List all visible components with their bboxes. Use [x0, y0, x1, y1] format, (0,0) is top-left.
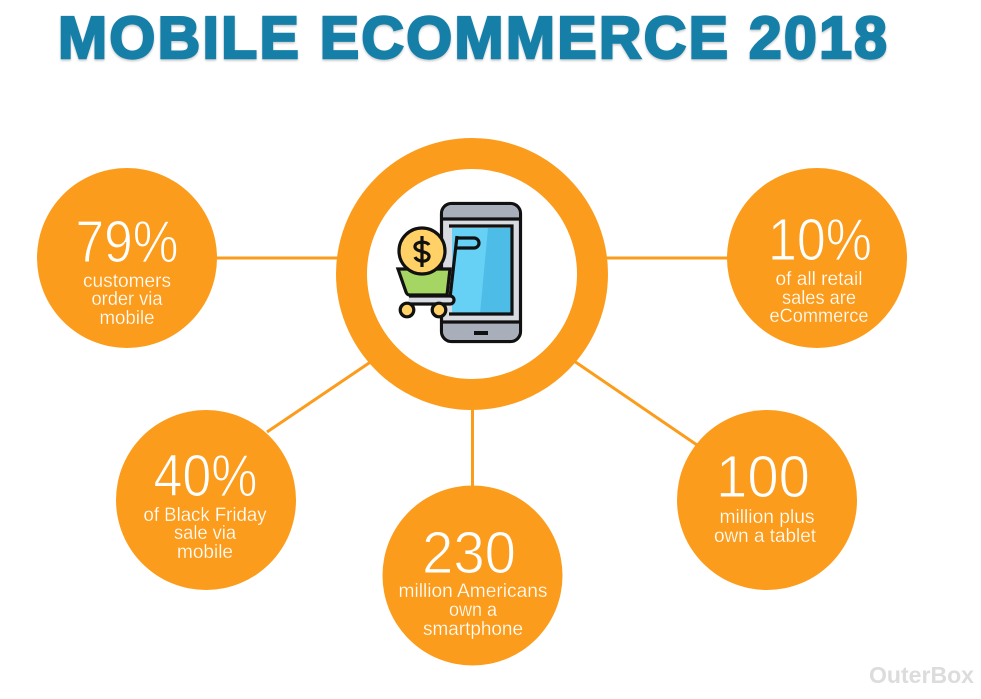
stat: 10% of all retail sales are eCommerce: 10%: [768, 207, 872, 273]
stat: 40% of Black Friday sale via mobile: mobile: [177, 542, 233, 563]
stat: 40% of Black Friday sale via mobile: of Black Friday: [144, 505, 267, 526]
stat: 230 million Americans own a smartphone: million Americans: [398, 581, 548, 602]
stat: 79% customers order via mobile: 79%: [76, 209, 178, 275]
stat: 40% of Black Friday sale via mobile: 40%: [154, 443, 258, 509]
central ring: [352, 154, 592, 394]
stat: 79% customers order via mobile: customers: [83, 271, 171, 292]
stat: 10% of all retail sales are eCommerce: [727, 168, 907, 348]
stat: 230 million Americans own a smartphone: [382, 486, 562, 666]
connector lines: [215, 258, 730, 490]
stat: 10% of all retail sales are eCommerce: eCommerce: [770, 306, 868, 327]
icon: phone: [442, 204, 520, 342]
stat: 10% of all retail sales are eCommerce: sales are: [782, 288, 856, 309]
icon: phone with shopping cart: [398, 204, 520, 342]
title: MOBILE ECOMMERCE 2018: [58, 5, 887, 71]
icon: cart: [398, 236, 479, 317]
stat: 79% customers order via mobile: order via: [92, 289, 163, 310]
icon: dollar coin: [399, 228, 445, 274]
stat: 230 million Americans own a smartphone: own a: [449, 600, 497, 621]
stat: 100 million plus own a tablet: million plus: [720, 507, 814, 528]
stat: 40% of Black Friday sale via mobile: [116, 410, 296, 590]
stat: 230 million Americans own a smartphone: smartphone: [423, 619, 523, 640]
stat: 79% customers order via mobile: mobile: [100, 308, 154, 329]
stat: 100 million plus own a tablet: 100: [716, 444, 810, 510]
watermark: OuterBox: [869, 662, 974, 688]
stat: 230 million Americans own a smartphone: 230: [422, 520, 516, 586]
stat: 100 million plus own a tablet: [677, 410, 857, 590]
stat: 100 million plus own a tablet: own a tablet: [714, 526, 817, 547]
stat: 10% of all retail sales are eCommerce: of all retail: [776, 269, 862, 290]
stat: 40% of Black Friday sale via mobile: sale via: [174, 523, 236, 544]
stat: 79% customers order via mobile: [37, 168, 217, 348]
